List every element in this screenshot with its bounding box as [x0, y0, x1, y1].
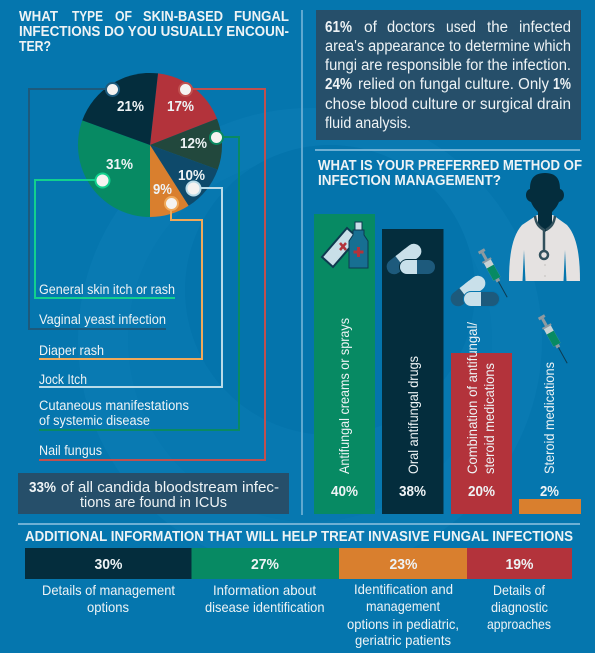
icon: doctor [509, 173, 580, 281]
bar: combination of antifungal and steroid medications: Combination of antifungal/ [464, 322, 480, 474]
bar: antifungal creams or sprays [314, 214, 375, 514]
callout: diagnosis methods: relied on fungal culture. Only [358, 76, 549, 93]
segment: details of management options 30%: Details of management [42, 582, 175, 598]
icon: capsules and syringe [448, 248, 512, 309]
segment: information about disease identification 27%: 27% [251, 557, 279, 573]
segment: details of management options 30%: options [87, 599, 129, 615]
legend labels [39, 282, 189, 458]
legend labels: Diaper rash [39, 343, 104, 358]
segment: details of diagnostic approaches 19%: 19% [506, 557, 534, 573]
callout: diagnosis methods: doctors [387, 19, 435, 36]
bar: oral antifungal drugs: 38% [399, 484, 426, 500]
segment: details of diagnostic approaches 19% [467, 548, 572, 632]
title: skin-based fungal infections: FUNGAL [234, 9, 289, 25]
bar: steroid medications [519, 362, 581, 514]
connector: general skin itch or rash [35, 174, 175, 298]
connector: cutaneous manifestations [39, 131, 239, 430]
bar: combination of antifungal and steroid medications: 20% [468, 484, 495, 500]
callout: candida in ICUs [18, 473, 289, 514]
bar: antifungal creams or sprays: 40% [331, 484, 358, 500]
bar: oral antifungal drugs: Oral antifungal drugs [405, 356, 421, 474]
legend labels: Nail fungus [39, 443, 102, 458]
segment: details of diagnostic approaches 19%: Details of [493, 582, 545, 598]
icon: spray and wipes [322, 222, 368, 268]
bar: steroid medications: 2% [540, 484, 559, 500]
title: skin-based fungal infections [19, 9, 289, 55]
callout: diagnosis methods: 61% [325, 19, 352, 36]
legend labels: General skin itch or rash [39, 282, 175, 297]
connector: jock itch [39, 182, 222, 387]
callout: diagnosis methods: of [364, 19, 378, 36]
segment: information about disease identification 27%: disease identification [205, 599, 324, 615]
bar: antifungal creams or sprays: Antifungal creams or sprays [336, 318, 352, 474]
pie chart: infection types: 10% [178, 168, 205, 184]
callout: diagnosis methods: chose blood culture or surgical drain [325, 96, 571, 113]
title: skin-based fungal infections: TYPE [72, 9, 103, 25]
bar: oral antifungal drugs [382, 229, 444, 514]
connector: nail fungus [39, 83, 265, 460]
callout: diagnosis methods [316, 10, 581, 140]
title: skin-based fungal infections: OF [115, 9, 132, 25]
callout: diagnosis methods: 24% [325, 76, 352, 93]
segment: information about disease identification 27% [192, 548, 339, 615]
legend labels: Vaginal yeast infection [39, 312, 166, 327]
segment: details of management options 30%: 30% [94, 557, 123, 573]
pie chart: infection types: 31% [106, 157, 133, 173]
icon: syringe [537, 314, 572, 366]
callout: diagnosis methods: fluid analysis. [325, 115, 411, 132]
title: skin-based fungal infections: INFECTIONS DO YOU USUALLY ENCOUN- [19, 24, 289, 40]
pie chart: infection types: 9% [153, 182, 172, 198]
segment: identification and management in pediatric and geriatric patients 23%: options in pediatric, [347, 616, 459, 632]
pie chart: infection types: 21% [117, 99, 144, 115]
segment: details of diagnostic approaches 19%: diagnostic [491, 599, 548, 615]
icon: capsules [384, 241, 436, 277]
segment: identification and management in pediatric and geriatric patients 23% [339, 548, 467, 648]
callout: candida in ICUs: of all candida bloodstream infec- [61, 480, 279, 496]
callout: diagnosis methods: the [487, 19, 508, 36]
legend labels: of systemic disease [39, 413, 150, 428]
legend labels: Jock Itch [39, 372, 87, 387]
pie chart: infection types: 12% [180, 136, 207, 152]
segment: details of diagnostic approaches 19%: approaches [487, 616, 551, 632]
bar: combination of antifungal and steroid medications [451, 322, 512, 514]
segment: information about disease identification 27%: Information about [213, 582, 316, 598]
bar: steroid medications: Steroid medications [541, 362, 557, 474]
bar: combination of antifungal and steroid medications: steroid medications [481, 363, 497, 474]
heading: preferred method of infection management [318, 158, 582, 189]
segment: identification and management in pediatric and geriatric patients 23%: management [366, 598, 440, 614]
pie chart: infection types [78, 73, 222, 217]
pie chart: infection types: 17% [167, 99, 194, 115]
segment: identification and management in pediatric and geriatric patients 23%: 23% [390, 557, 418, 573]
title: skin-based fungal infections: WHAT [19, 9, 58, 25]
connector: diaper rash [39, 197, 202, 359]
connector: vaginal yeast infection [29, 83, 166, 329]
segment: details of management options 30% [25, 548, 192, 615]
callout: diagnosis methods: used [446, 19, 476, 36]
callout: diagnosis methods: fungi are responsible for the infection. [325, 57, 571, 74]
callout: diagnosis methods: area's appearance to determine which [325, 38, 571, 55]
callout: candida in ICUs: 33% [29, 480, 56, 496]
heading: preferred method of infection management: INFECTION MANAGEMENT? [318, 173, 501, 189]
title: skin-based fungal infections: SKIN-BASED [143, 9, 223, 25]
legend labels: Cutaneous manifestations [39, 398, 189, 413]
callout: diagnosis methods: infected [519, 19, 571, 36]
callout: diagnosis methods: 1% [553, 76, 571, 93]
title: skin-based fungal infections: TER? [19, 39, 51, 55]
callout: candida in ICUs: tions are found in ICUs [80, 495, 227, 511]
segment: identification and management in pediatric and geriatric patients 23%: Identification and [354, 581, 453, 597]
segment: identification and management in pediatric and geriatric patients 23%: geriatric patients [355, 632, 451, 648]
